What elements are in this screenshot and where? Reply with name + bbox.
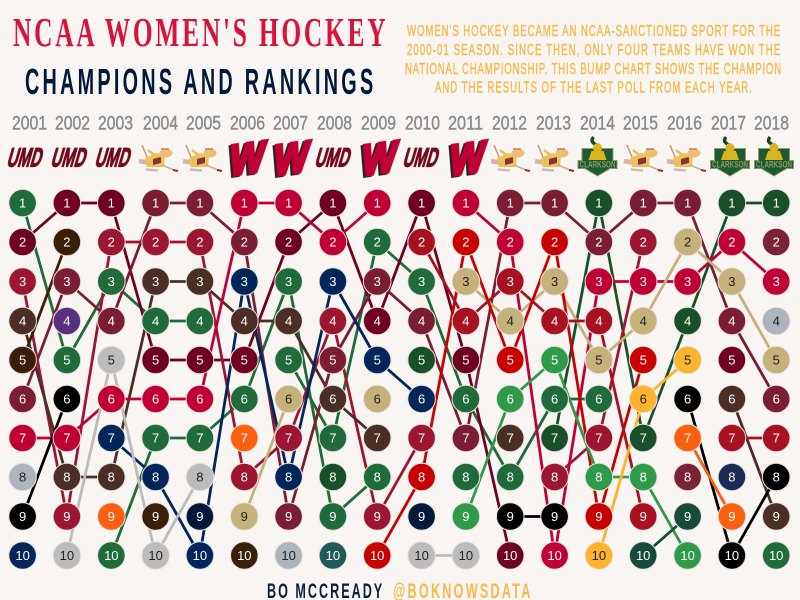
icon: Clarkson logo 2018 [754,137,794,176]
rank nodes 2004: 1 [152,196,159,210]
rank nodes 2014: 7 [595,430,603,446]
icon: Wisconsin W logo 2006: W [227,132,269,186]
rank nodes 2004: 4 [152,314,159,328]
rank nodes 2004: 2 [152,234,159,250]
rank nodes 2004: 6 [152,392,159,406]
rank nodes 2010 [408,189,435,569]
icon: Wisconsin W logo 2007: W [271,132,313,186]
rank nodes 2014: 5 [595,352,603,368]
rank nodes 2001 [9,189,36,569]
rank nodes 2015: 5 [640,352,647,368]
rank nodes 2007: 8 [285,470,292,484]
rank nodes 2001: 7 [19,430,26,446]
rank nodes 2011: 3 [462,274,470,289]
rank nodes 2007: 2 [285,234,292,250]
rank nodes 2015: 9 [640,509,647,524]
year labels: 2016 [667,112,702,134]
rank nodes 2003: 3 [108,274,115,289]
rank nodes 2008: 9 [329,509,337,524]
rank nodes 2005: 6 [196,392,204,406]
rank nodes 2001: 4 [19,314,26,328]
rank nodes 2015 [629,189,657,569]
rank nodes 2006: 2 [241,234,248,250]
rank nodes 2011 [452,189,480,569]
rank nodes 2018: 9 [773,509,780,524]
rank nodes 2005: 5 [196,352,204,368]
icon: gopher logo 2012 [491,145,530,171]
rank nodes 2009: 5 [374,352,381,368]
rank nodes 2010: 7 [418,430,425,446]
rank nodes 2002: 8 [63,470,71,484]
rank nodes 2003 [98,189,125,569]
rank nodes 2017: 7 [728,430,736,446]
year labels: 2006 [230,112,265,134]
rank nodes 2016: 7 [684,430,691,446]
rank nodes 2011: 10 [459,548,473,563]
rank nodes 2005: 8 [196,470,204,484]
rank nodes 2008: 5 [329,352,337,368]
rank nodes 2013: 5 [551,352,558,368]
rank nodes 2004 [142,189,169,569]
rank nodes 2011: 9 [462,509,470,524]
rank nodes 2002: 5 [63,352,71,368]
rank nodes 2009: 9 [374,509,381,524]
rank nodes 2008 [319,189,347,569]
rank nodes 2003: 8 [108,470,115,484]
rank nodes 2002: 3 [63,274,71,289]
rank nodes 2001: 8 [19,470,26,484]
rank nodes 2007: 9 [285,509,292,524]
rank nodes 2014: 6 [595,392,603,406]
icon: UMD logo 2010: UMD [400,142,443,172]
rank nodes 2009: 6 [374,392,381,406]
rank nodes 2002: 7 [63,430,71,446]
icon: gopher logo 2005 [183,145,222,171]
rank nodes 2017: 10 [725,548,739,563]
rank nodes 2005: 2 [196,234,204,250]
rank nodes 2010: 4 [418,314,425,328]
rank nodes 2004: 5 [152,352,159,368]
rank nodes 2003: 6 [108,392,115,406]
rank nodes 2008: 1 [329,196,337,210]
rank nodes 2014: 9 [595,509,603,524]
intro paragraph: 2000-01 SEASON. SINCE THEN, ONLY FOUR TEAMS HAVE WON THE [407,40,780,59]
rank nodes 2006: 5 [241,352,248,368]
rank nodes 2017: 8 [728,470,736,484]
rank nodes 2002: 9 [63,509,71,524]
rank nodes 2016: 1 [684,196,691,210]
rank nodes 2012: 5 [507,352,514,368]
rank nodes 2009: 2 [374,234,381,250]
icon: Clarkson logo 2017 [710,137,750,176]
rank nodes 2005: 7 [196,430,204,446]
year labels: 2017 [711,112,746,134]
rank nodes 2008: 4 [329,314,337,328]
year labels: 2018 [754,112,789,134]
rank nodes 2010: 9 [418,509,425,524]
title: NCAA WOMEN'S HOCKEY [13,11,386,56]
year labels: 2007 [273,112,308,134]
rank nodes 2003: 9 [108,509,115,524]
rank nodes 2016: 3 [684,274,691,289]
rank nodes 2007: 1 [285,196,292,210]
subtitle: CHAMPIONS AND RANKINGS [25,63,373,103]
rank nodes 2010: 1 [418,196,425,210]
rank nodes 2002: 1 [63,196,71,210]
rank nodes 2016: 2 [684,234,691,250]
rank nodes 2010: 10 [414,548,429,563]
rank nodes 2010: 6 [418,392,425,406]
year labels: 2012 [492,112,527,134]
rank nodes 2013: 9 [551,509,558,524]
rank nodes 2018: 7 [773,430,780,446]
rank nodes 2011: 7 [462,430,470,446]
rank nodes 2008: 10 [326,548,340,563]
rank nodes 2011: 5 [462,352,470,368]
rank nodes 2011: 6 [462,392,470,406]
rank nodes 2003: 1 [108,196,115,210]
rank nodes 2008: 3 [329,274,337,289]
rank nodes 2006: 9 [241,509,248,524]
rank nodes 2001: 10 [15,548,30,563]
rank nodes 2018: 6 [773,392,780,406]
rank nodes 2018: 1 [773,196,780,210]
rank nodes 2014: 2 [595,234,603,250]
rank nodes 2009: 3 [374,274,381,289]
year labels: 2010 [405,112,440,134]
year labels: 2004 [143,112,178,134]
rank nodes 2006: 6 [241,392,248,406]
rank nodes 2017: 3 [728,274,736,289]
rank nodes 2017: 1 [728,196,736,210]
rank nodes 2012: 2 [507,234,514,250]
rank nodes 2009: 10 [370,548,384,563]
rank nodes 2016: 9 [684,509,691,524]
icon: UMD logo 2002: UMD [48,142,91,172]
rank nodes 2010: 2 [418,234,425,250]
rank nodes 2006: 1 [241,196,248,210]
icon: Clarkson logo 2017: CLARKSON [712,160,748,170]
rank nodes 2002: 2 [63,234,71,250]
rank nodes 2010: 3 [418,274,425,289]
rank nodes 2017: 2 [728,234,736,250]
year labels: 2014 [580,112,615,134]
rank nodes 2013: 8 [551,470,558,484]
rank nodes 2016 [674,189,701,569]
rank nodes 2016: 8 [684,470,691,484]
rank nodes 2013 [541,189,568,569]
year labels: 2011 [448,112,483,134]
rank nodes 2007: 4 [285,314,292,328]
rank nodes 2012: 8 [507,470,514,484]
rank nodes 2004: 8 [152,470,159,484]
rank nodes 2012: 3 [507,274,514,289]
rank nodes 2018: 2 [773,234,780,250]
year labels: 2009 [361,112,396,134]
icon: gopher logo 2016 [667,145,706,171]
rank nodes 2006: 8 [241,470,248,484]
rank nodes 2018: 5 [773,352,780,368]
rank nodes 2001: 3 [19,274,26,289]
rank nodes 2008: 8 [329,470,337,484]
rank nodes 2001: 1 [19,196,26,210]
rank nodes 2007: 3 [285,274,292,289]
icon: UMD logo 2001: UMD [4,142,47,172]
icon: Wisconsin W logo 2009: W [359,132,401,186]
rank nodes 2018: 8 [773,470,780,484]
intro paragraph: WOMEN'S HOCKEY BECAME AN NCAA-SANCTIONED SPORT FOR THE [407,21,780,40]
rank nodes 2015: 4 [640,314,647,328]
rank nodes 2006 [230,189,258,569]
rank nodes 2009: 7 [374,430,381,446]
rank nodes 2002: 6 [63,392,71,406]
rank nodes 2004: 9 [152,509,159,524]
rank nodes 2017: 6 [728,392,736,406]
rank nodes 2008: 6 [329,392,337,406]
champion logos row [4,132,794,186]
rank nodes 2007: 7 [285,430,292,446]
rank nodes 2013: 2 [551,234,558,250]
rank nodes 2014 [585,189,613,569]
intro paragraph [405,21,781,96]
rank nodes 2007: 6 [285,392,292,406]
rank nodes 2002 [53,189,81,569]
rank nodes 2014: 1 [595,196,603,210]
rank nodes 2002: 4 [63,314,71,328]
year labels: 2001 [12,112,47,134]
icon: Clarkson logo 2014 [578,137,618,176]
rank nodes 2008: 7 [329,430,337,446]
rank nodes 2005: 10 [193,548,207,563]
rank nodes 2007: 5 [285,352,292,368]
icon: gopher logo 2015 [624,145,663,171]
icon: Clarkson logo 2014: CLARKSON [580,160,616,170]
rank nodes 2004: 10 [148,548,163,563]
rank nodes 2011: 4 [462,314,470,328]
rank nodes 2017: 9 [728,509,736,524]
icon: Wisconsin W logo 2011: W [447,132,489,186]
rank nodes 2005: 9 [196,509,204,524]
rank nodes 2003: 7 [108,430,115,446]
rank nodes 2016: 10 [680,548,695,563]
rank nodes 2002: 10 [60,548,74,563]
rank nodes 2001: 5 [19,352,26,368]
rank nodes 2015: 2 [640,234,647,250]
rank nodes 2016: 5 [684,352,691,368]
rank nodes 2017: 4 [728,314,736,328]
year labels: 2002 [55,112,90,134]
rank nodes 2013: 3 [551,274,558,289]
rank nodes 2013: 1 [551,196,558,210]
rank nodes 2018: 4 [773,314,780,328]
rank nodes 2012: 10 [503,548,517,563]
rank nodes 2018: 10 [769,548,783,563]
year labels [12,112,789,134]
rank nodes 2014: 10 [592,548,606,563]
rank nodes 2003: 4 [108,314,115,328]
bump chart connecting lines [23,203,776,556]
rank nodes 2006: 10 [237,548,252,563]
rank nodes 2018 [762,189,790,569]
year labels: 2008 [317,112,352,134]
rank nodes 2011: 2 [462,234,470,250]
rank nodes 2007: 10 [281,548,296,563]
rank nodes 2015: 3 [640,274,647,289]
rank nodes 2014: 4 [595,314,603,328]
rank nodes 2014: 8 [595,470,603,484]
footer credit [267,579,531,600]
rank nodes 2012: 4 [507,314,514,328]
year labels: 2015 [623,112,658,134]
intro paragraph: AND THE RESULTS OF THE LAST POLL FROM EACH YEAR. [435,78,752,96]
rank nodes 2003: 2 [108,234,115,250]
rank nodes 2015: 10 [636,548,650,563]
rank nodes 2011: 1 [462,196,470,210]
rank nodes 2009: 8 [374,470,381,484]
rank nodes 2017: 5 [728,352,736,368]
rank nodes 2012: 1 [507,196,514,210]
rank nodes 2003: 10 [104,548,119,563]
rank nodes 2001: 2 [19,234,26,250]
rank nodes 2001: 9 [19,509,26,524]
rank nodes 2013: 7 [551,430,558,446]
rank nodes 2017 [718,189,746,569]
rank nodes 2010: 5 [418,352,425,368]
rank nodes 2015: 8 [640,470,647,484]
rank nodes 2006: 7 [241,430,248,446]
rank nodes 2014: 3 [595,274,603,289]
rank nodes 2018: 3 [773,274,780,289]
icon: UMD logo 2008: UMD [312,142,355,172]
rank nodes 2008: 2 [329,234,337,250]
rank nodes 2012 [496,189,524,569]
year labels: 2013 [536,112,571,134]
rank nodes 2016: 6 [684,392,691,406]
rank nodes 2013: 4 [551,314,558,328]
rank nodes 2015: 1 [640,196,647,210]
rank nodes 2012: 7 [507,430,514,446]
icon: gopher logo 2004 [139,145,178,171]
rank nodes 2005 [186,189,214,569]
rank nodes 2005: 4 [196,314,204,328]
year labels: 2003 [98,112,133,134]
rank nodes 2001: 6 [19,392,26,406]
icon: gopher logo 2013 [535,145,574,171]
rank nodes 2007 [275,189,302,569]
year labels: 2005 [186,112,221,134]
rank nodes 2006: 3 [241,274,248,289]
rank nodes 2015: 7 [640,430,647,446]
rank nodes 2009 [363,189,391,569]
rank nodes 2010: 8 [418,470,425,484]
rank nodes 2004: 7 [152,430,159,446]
rank nodes 2006: 4 [241,314,248,328]
rank nodes 2016: 4 [684,314,691,328]
intro paragraph: NATIONAL CHAMPIONSHIP. THIS BUMP CHART SHOWS THE CHAMPION [405,59,781,78]
rank nodes 2005: 1 [196,196,204,210]
rank nodes 2013: 10 [547,548,562,563]
rank nodes 2003: 5 [108,352,115,368]
bump chart [9,189,790,569]
rank nodes 2012: 6 [507,392,514,406]
rank nodes 2009: 1 [374,196,381,210]
rank nodes 2012: 9 [507,509,514,524]
icon: UMD logo 2003: UMD [92,142,135,172]
rank nodes 2013: 6 [551,392,558,406]
rank nodes 2009: 4 [374,314,381,328]
rank nodes 2004: 3 [152,274,159,289]
rank nodes 2011: 8 [462,470,470,484]
rank nodes 2015: 6 [640,392,647,406]
rank nodes 2005: 3 [196,274,204,289]
